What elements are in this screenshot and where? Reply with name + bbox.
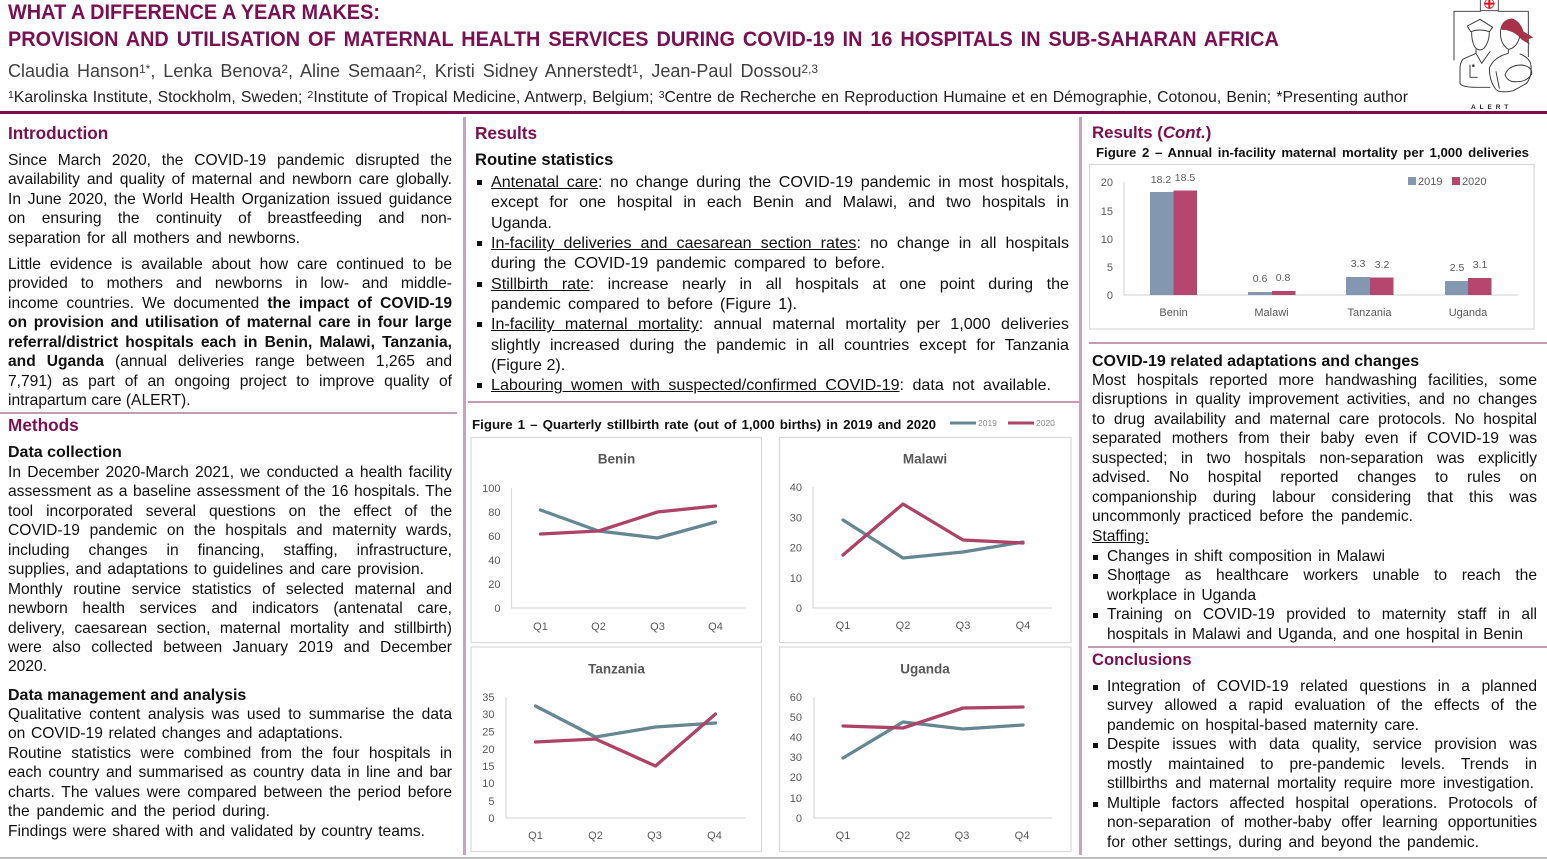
text: data management: charts. The values were compared between the period before bbox=[8, 784, 452, 801]
text: data management: Qualitative content analysis was used to summarise the data bbox=[8, 706, 452, 723]
chart: Malawi: Q1 bbox=[836, 620, 850, 632]
list: conclusions bbox=[1093, 678, 1537, 850]
subheading: adaptations and changes: COVID-19 related adaptations and changes bbox=[1092, 353, 1419, 370]
chart: Malawi: 0 bbox=[796, 603, 802, 615]
heading: conclusions: Conclusions bbox=[1092, 650, 1192, 669]
chart: Malawi: 40 bbox=[790, 482, 802, 494]
affiliations: 1Karolinska Institute, Stockholm, Sweden; 2Institute of Tropical Medicine, Antwerp, Belgium; 3Centre de Recherche en Reproduction Humaine et en Démographie, Cotonou, Benin; *Presenting author bbox=[8, 89, 1408, 106]
chart: Uganda: Q1 bbox=[836, 830, 850, 842]
text: introduction paragraph 2: income countries. We documented the impact of COVID-19 bbox=[8, 295, 452, 312]
text: adaptations: companionship during labour considering that this was bbox=[1092, 489, 1537, 506]
chart: Tanzania: 5 bbox=[488, 796, 494, 808]
chart: Uganda: 10 bbox=[790, 793, 802, 805]
text: adaptations: Most hospitals reported more handwashing facilities, some bbox=[1092, 372, 1537, 389]
heading: methods: Methods bbox=[8, 415, 79, 435]
subheading: routine statistics: Routine statistics bbox=[475, 150, 613, 169]
text: introduction paragraph 2: provided to mothers and newborns in low- and middle- bbox=[8, 275, 452, 292]
text: data collection: newborn health services and indicators (antenatal care, bbox=[8, 600, 452, 617]
authors: Claudia Hanson1*, Lenka Benova2, Aline Semaan2, Kristi Sidney Annerstedt1, Jean-Paul Dossou2,3 bbox=[8, 61, 818, 81]
header bbox=[8, 0, 1533, 111]
chart: Tanzania: 15 bbox=[482, 761, 494, 773]
chart: Malawi: Q4 bbox=[1016, 620, 1030, 632]
title: PROVISION AND UTILISATION OF MATERNAL HEALTH SERVICES DURING COVID-19 IN 16 HOSPITALS IN SUB-SAHARAN AFRICA bbox=[8, 28, 1279, 51]
list: conclusions: Despite issues with data quality, service provision was bbox=[1107, 736, 1537, 753]
chart: Tanzania: 30 bbox=[482, 709, 494, 721]
list: routine statistics: during the COVID-19 pandemic compared to before. bbox=[491, 254, 885, 272]
list: conclusions: pandemic on hospital-based maternity care. bbox=[1107, 717, 1419, 734]
heading: figure 1: Figure 1 – Quarterly stillbirth rate (out of 1,000 births) in 2019 and 2020 bbox=[472, 417, 936, 432]
subheading: staffing: Staffing: bbox=[1092, 528, 1149, 545]
text: data collection: assessment as a baseline assessment of the 16 hospitals. The bbox=[8, 483, 452, 500]
text: data management: the pandemic and the period during. bbox=[8, 803, 270, 820]
list: routine statistics: except for one hospital in each Benin and Malawi, and two hospitals in bbox=[491, 193, 1069, 211]
chart: annual maternal mortality bars: 2019 bbox=[1418, 176, 1442, 188]
list: routine statistics: pandemic compared to before (Figure 1). bbox=[491, 295, 797, 313]
chart: Malawi: 10 bbox=[790, 573, 802, 585]
chart: Uganda: 20 bbox=[790, 772, 802, 784]
list: conclusions: non-separation of mother-baby offer learning opportunities bbox=[1107, 814, 1537, 831]
text: introduction paragraph 2 bbox=[8, 256, 452, 409]
text: introduction paragraph 2: intrapartum care (ALERT). bbox=[8, 392, 191, 409]
legend: figure 1: 2020 bbox=[1036, 418, 1055, 428]
chart: annual maternal mortality bars: 15 bbox=[1101, 206, 1113, 218]
panel: results bbox=[470, 123, 1072, 852]
icon: ALERT logo bbox=[1454, 0, 1533, 111]
icon: ALERT logo: ALERT bbox=[1471, 104, 1512, 111]
chart: annual maternal mortality bars: Uganda bbox=[1449, 307, 1488, 319]
text: introduction paragraph 2: Little evidence is available about how care continued to be bbox=[8, 256, 452, 273]
chart: Benin: Q1 bbox=[533, 621, 547, 633]
list: routine statistics: In-facility maternal mortality: annual maternal mortality per 1,000 deliveries bbox=[491, 315, 1069, 333]
chart: Tanzania: 20 bbox=[482, 744, 494, 756]
list: staffing: Training on COVID-19 provided to maternity staff in all bbox=[1107, 606, 1537, 623]
list: conclusions: Integration of COVID-19 related questions in a planned bbox=[1107, 678, 1537, 695]
chart: annual maternal mortality bars: 0.6 bbox=[1253, 273, 1267, 285]
chart: Tanzania: Q1 bbox=[528, 830, 542, 842]
list: conclusions: Multiple factors affected hospital operations. Protocols of bbox=[1107, 795, 1537, 812]
chart: Malawi: 30 bbox=[790, 512, 802, 524]
text: data collection: delivery, caesarean section, maternal mortality and stillbirth) bbox=[8, 620, 452, 636]
chart: annual maternal mortality bars bbox=[1089, 164, 1534, 330]
text: introduction paragraph 2: 7,791) as part of an ongoing project to improve quality of bbox=[8, 373, 452, 390]
text: adaptations: suspected; in two hospitals non-separation was explicitly bbox=[1092, 450, 1537, 467]
title: WHAT A DIFFERENCE A YEAR MAKES: bbox=[8, 1, 380, 24]
list: conclusions: stillbirths and maternal mortality require more investigation. bbox=[1107, 775, 1534, 792]
text: introduction paragraph 1: Since March 2020, the COVID-19 pandemic disrupted the bbox=[8, 152, 452, 169]
text: data collection: tool incorporated several questions on the effect of the bbox=[8, 503, 452, 520]
list: conclusions: mostly maintained to pre-pandemic levels. Trends in bbox=[1107, 756, 1537, 773]
chart: Benin: 40 bbox=[488, 555, 500, 567]
text: data collection: COVID-19 pandemic on the hospitals and maternity wards, bbox=[8, 522, 452, 539]
chart: Benin: 0 bbox=[494, 603, 500, 615]
panel: results continued and conclusions bbox=[1089, 123, 1537, 850]
text: adaptations: separated mothers from their baby even if COVID-19 was bbox=[1092, 430, 1537, 447]
chart: annual maternal mortality bars: 2.5 bbox=[1450, 262, 1464, 274]
chart: Uganda: Q4 bbox=[1015, 830, 1029, 842]
chart: annual maternal mortality bars: 18.2 bbox=[1151, 174, 1171, 186]
legend: figure 1 bbox=[950, 418, 1055, 428]
chart: Uganda: Uganda bbox=[900, 662, 950, 676]
list: staffing: Changes in shift composition in Malawi bbox=[1107, 548, 1385, 565]
chart: Uganda: 50 bbox=[790, 712, 802, 724]
chart: Malawi: 20 bbox=[790, 542, 802, 554]
chart: Uganda: 60 bbox=[790, 692, 802, 704]
chart: Tanzania: Q2 bbox=[588, 830, 602, 842]
list: routine statistics: Antenatal care: no change during the COVID-19 pandemic in most hospitals, bbox=[491, 173, 1069, 191]
text: data collection: 2020. bbox=[8, 658, 47, 675]
chart: Uganda: 40 bbox=[790, 732, 802, 744]
list: conclusions: for other settings, during and beyond the pandemic. bbox=[1107, 834, 1479, 850]
list: routine statistics: Stillbirth rate: increase nearly in all hospitals at one point during the bbox=[491, 275, 1069, 293]
chart: Tanzania bbox=[470, 646, 762, 852]
chart: annual maternal mortality bars: Benin bbox=[1159, 307, 1188, 319]
chart: Malawi: Q2 bbox=[896, 620, 910, 632]
chart: Benin: 80 bbox=[488, 507, 500, 519]
chart: Benin bbox=[470, 437, 762, 643]
text: introduction paragraph 1: on ensuring the continuity of breastfeeding and non- bbox=[8, 210, 452, 227]
chart: Uganda: Q3 bbox=[955, 830, 969, 842]
chart: Benin: Q4 bbox=[708, 621, 722, 633]
legend: figure 1: 2019 bbox=[978, 418, 997, 428]
chart: Uganda: 30 bbox=[790, 752, 802, 764]
chart: Tanzania: 35 bbox=[482, 692, 494, 704]
text: adaptations: uncommonly practiced before the pandemic. bbox=[1092, 508, 1413, 525]
chart: Malawi: Malawi bbox=[903, 452, 947, 466]
heading: figure 2: Figure 2 – Annual in-facility maternal mortality per 1,000 deliveries bbox=[1096, 145, 1529, 160]
chart: Uganda bbox=[779, 646, 1072, 852]
list: routine statistics: Uganda. bbox=[491, 214, 552, 232]
panel: introduction and methods bbox=[8, 123, 452, 840]
chart: Tanzania: Tanzania bbox=[588, 662, 645, 676]
list: routine statistics: slightly increased during the pandemic in all countries except for Tanzania bbox=[491, 336, 1069, 354]
chart: annual maternal mortality bars: 10 bbox=[1101, 234, 1113, 246]
text: adaptations bbox=[1092, 372, 1537, 525]
text: data collection bbox=[8, 464, 452, 675]
chart: Benin: Benin bbox=[597, 452, 635, 466]
title bbox=[8, 1, 1279, 51]
chart: annual maternal mortality bars: 20 bbox=[1101, 177, 1113, 189]
text: introduction paragraph 1: separation for all mothers and newborns. bbox=[8, 230, 300, 247]
text: data collection: were also collected between January 2019 and December bbox=[8, 639, 452, 656]
text: introduction paragraph 2: and Uganda (annual deliveries range between 1,265 and bbox=[8, 353, 452, 370]
chart: annual maternal mortality bars: 3.2 bbox=[1375, 259, 1389, 271]
text: adaptations: advised. No hospital reported changes to rules on bbox=[1092, 469, 1537, 486]
chart: Benin: 100 bbox=[482, 483, 500, 495]
chart: Uganda: Q2 bbox=[896, 830, 910, 842]
chart: Benin: 60 bbox=[488, 531, 500, 543]
list: conclusions: survey allowed a rapid evaluation of the effects of the bbox=[1107, 697, 1537, 714]
text: data management bbox=[8, 706, 452, 840]
chart: Tanzania: 25 bbox=[482, 726, 494, 738]
chart: annual maternal mortality bars: 3.1 bbox=[1473, 259, 1487, 271]
chart: annual maternal mortality bars: Malawi bbox=[1254, 307, 1289, 319]
chart: annual maternal mortality bars: Tanzania bbox=[1347, 307, 1392, 319]
chart: annual maternal mortality bars: 0.8 bbox=[1276, 272, 1290, 284]
heading: introduction: Introduction bbox=[8, 123, 108, 143]
text: data collection: Monthly routine service statistics of selected maternal and bbox=[8, 581, 452, 598]
text: data collection: In December 2020-March 2021, we conducted a health facility bbox=[8, 464, 452, 481]
list: staffing: hospitals in Malawi and Uganda, and one hospital in Benin bbox=[1107, 626, 1523, 643]
chart: Uganda: 0 bbox=[796, 813, 802, 825]
list: routine statistics: Labouring women with suspected/confirmed COVID-19: data not available. bbox=[491, 376, 1051, 394]
text: data management: on COVID-19 related changes and adaptations. bbox=[8, 725, 343, 742]
chart: annual maternal mortality bars: 18.5 bbox=[1175, 172, 1195, 184]
list: staffing: Shortage as healthcare workers unable to reach the bbox=[1107, 567, 1537, 584]
text: data management: each country and summarised as country data in line and bar bbox=[8, 764, 452, 781]
chart: Benin: Q2 bbox=[591, 621, 605, 633]
text: adaptations: disruptions in quality improvement activities, and no changes bbox=[1092, 391, 1537, 408]
chart: Tanzania: Q4 bbox=[707, 830, 721, 842]
text: introduction paragraph 1: availability and quality of maternal and newborn care globally. bbox=[8, 171, 452, 188]
chart: Tanzania: 0 bbox=[488, 813, 494, 825]
text: data collection: including changes in financing, staffing, infrastructure, bbox=[8, 542, 452, 559]
chart: Malawi bbox=[779, 437, 1072, 643]
subheading: data collection: Data collection bbox=[8, 444, 122, 461]
text: data management: Findings were shared with and validated by country teams. bbox=[8, 823, 425, 840]
list: routine statistics: In-facility deliveries and caesarean section rates: no change in all hospitals bbox=[491, 234, 1069, 252]
list: routine statistics: (Figure 2). bbox=[491, 356, 565, 374]
chart: annual maternal mortality bars: 0 bbox=[1107, 290, 1113, 302]
text: data collection: supplies, and adaptations to guidelines and care provision. bbox=[8, 561, 424, 578]
heading: results continued: Results (Cont.) bbox=[1092, 123, 1211, 142]
text: introduction paragraph 1 bbox=[8, 152, 452, 247]
text: introduction paragraph 2: referral/district hospitals each in Benin, Malawi, Tanzania, bbox=[8, 334, 452, 351]
list: staffing bbox=[1093, 548, 1537, 643]
text: introduction paragraph 2: on provision and utilisation of maternal care in four large bbox=[8, 314, 452, 331]
chart: Benin: Q3 bbox=[650, 621, 664, 633]
chart: Benin: 20 bbox=[488, 579, 500, 591]
text: adaptations: to drug availability and maternal care protocols. No hospital bbox=[1092, 411, 1537, 428]
list: staffing: workplace in Uganda bbox=[1107, 587, 1256, 604]
text: introduction paragraph 1: In June 2020, the World Health Organization issued guidance bbox=[8, 191, 452, 208]
text: data management: Routine statistics were combined from the four hospitals in bbox=[8, 745, 452, 762]
chart: annual maternal mortality bars: 2020 bbox=[1462, 176, 1486, 188]
list: routine statistics bbox=[477, 173, 1069, 394]
chart: Tanzania: 10 bbox=[482, 778, 494, 790]
chart: annual maternal mortality bars: 5 bbox=[1107, 262, 1113, 274]
heading: results: Results bbox=[475, 123, 537, 143]
chart: Tanzania: Q3 bbox=[647, 830, 661, 842]
subheading: data management and analysis: Data management and analysis bbox=[8, 687, 246, 704]
chart: Malawi: Q3 bbox=[956, 620, 970, 632]
chart: annual maternal mortality bars: 3.3 bbox=[1351, 258, 1365, 270]
